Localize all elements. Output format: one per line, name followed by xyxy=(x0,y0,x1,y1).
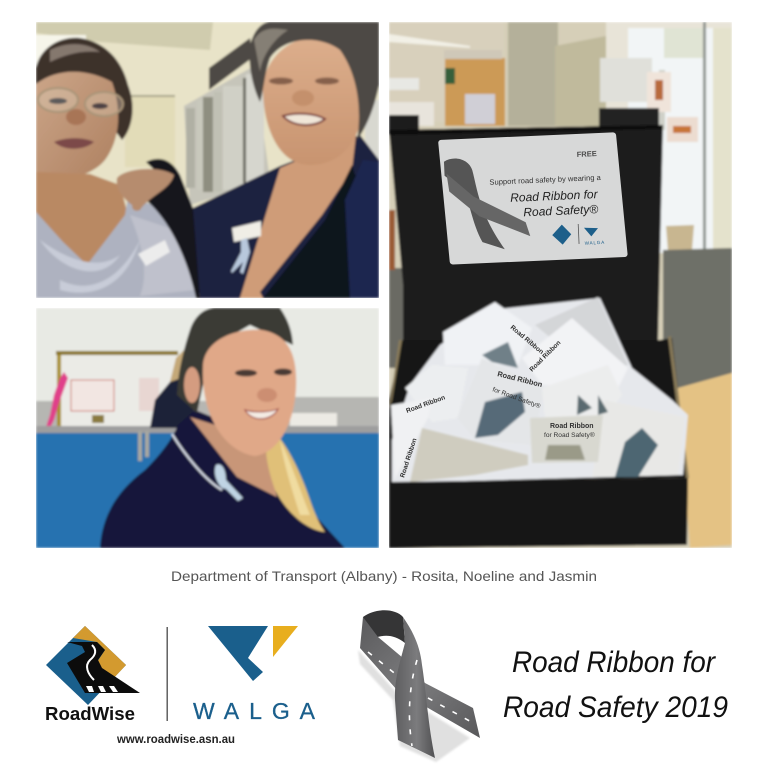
script title xyxy=(503,646,728,724)
collar piping xyxy=(172,434,222,490)
photo: Jasmin xyxy=(36,308,379,548)
packet labels: Road Ribbon xyxy=(528,339,562,373)
Jasmin body xyxy=(100,410,345,548)
front band xyxy=(395,617,435,758)
blue partitions xyxy=(36,431,379,548)
packet labels: for Road Safety® xyxy=(491,385,542,410)
hand on shoulder xyxy=(117,169,174,211)
photo: ribbon display box xyxy=(389,22,732,548)
ribbon pin xyxy=(215,464,243,501)
right badge and ribbon xyxy=(232,221,261,242)
packet labels: Road Ribbon xyxy=(509,324,545,356)
background colleague xyxy=(149,378,196,430)
RoadWise logo xyxy=(45,626,140,724)
neck xyxy=(190,417,277,497)
blonde ponytail xyxy=(266,425,325,532)
sign ribbon xyxy=(444,155,531,252)
waste bin xyxy=(666,225,694,251)
packet labels: Road Ribbon xyxy=(550,423,594,430)
sign on stand: Road Ribbon for xyxy=(510,187,599,205)
RoadWise logo: RoadWise xyxy=(45,703,135,724)
website address: www.roadwise.asn.au xyxy=(116,734,235,746)
caption: Department of Transport (Albany) - Rosita, Noeline and Jasmin xyxy=(171,568,597,584)
left woman's hair xyxy=(36,38,133,140)
script title: Road Safety 2019 xyxy=(503,691,728,724)
table xyxy=(678,373,732,548)
box interior xyxy=(389,338,688,482)
hair xyxy=(177,308,293,413)
dark sleeve xyxy=(146,159,200,298)
floor xyxy=(663,248,732,390)
packet labels: for Road Safety® xyxy=(544,431,595,439)
packet labels: Road Ribbon xyxy=(405,394,446,415)
box front xyxy=(389,478,688,548)
photo: Rosita and Noeline xyxy=(36,22,379,298)
left blouse xyxy=(36,197,197,298)
left neck and chest xyxy=(36,172,128,266)
ribbon packets xyxy=(443,302,532,365)
WALGA logo xyxy=(193,626,316,724)
plastic sleeve base xyxy=(392,298,688,483)
sign on stand xyxy=(438,132,628,265)
right face xyxy=(263,38,362,165)
back band xyxy=(360,617,480,738)
sign on stand: Support road safety by wearing a xyxy=(489,173,602,187)
black stand xyxy=(389,125,663,340)
right woman's body xyxy=(193,135,379,298)
packet labels xyxy=(399,324,595,479)
packet labels: Road Ribbon xyxy=(497,369,544,389)
sign on stand: FREE xyxy=(577,149,597,159)
whiteboard xyxy=(59,400,154,428)
pink flowers xyxy=(45,372,68,432)
sign on stand: Road Safety® xyxy=(523,202,599,219)
name badge left xyxy=(138,240,170,266)
ribbon loop inside xyxy=(363,610,405,643)
face xyxy=(203,330,296,456)
road ribbon icon xyxy=(358,610,480,762)
script title: Road Ribbon for xyxy=(512,646,716,679)
packet labels: Road Ribbon xyxy=(399,437,419,479)
logo divider xyxy=(166,627,168,721)
WALGA logo: WALGA xyxy=(193,698,316,724)
shelf and noticeboard xyxy=(389,34,470,48)
sign on stand: WALGA xyxy=(585,240,605,246)
ribbon shadow xyxy=(358,650,470,762)
